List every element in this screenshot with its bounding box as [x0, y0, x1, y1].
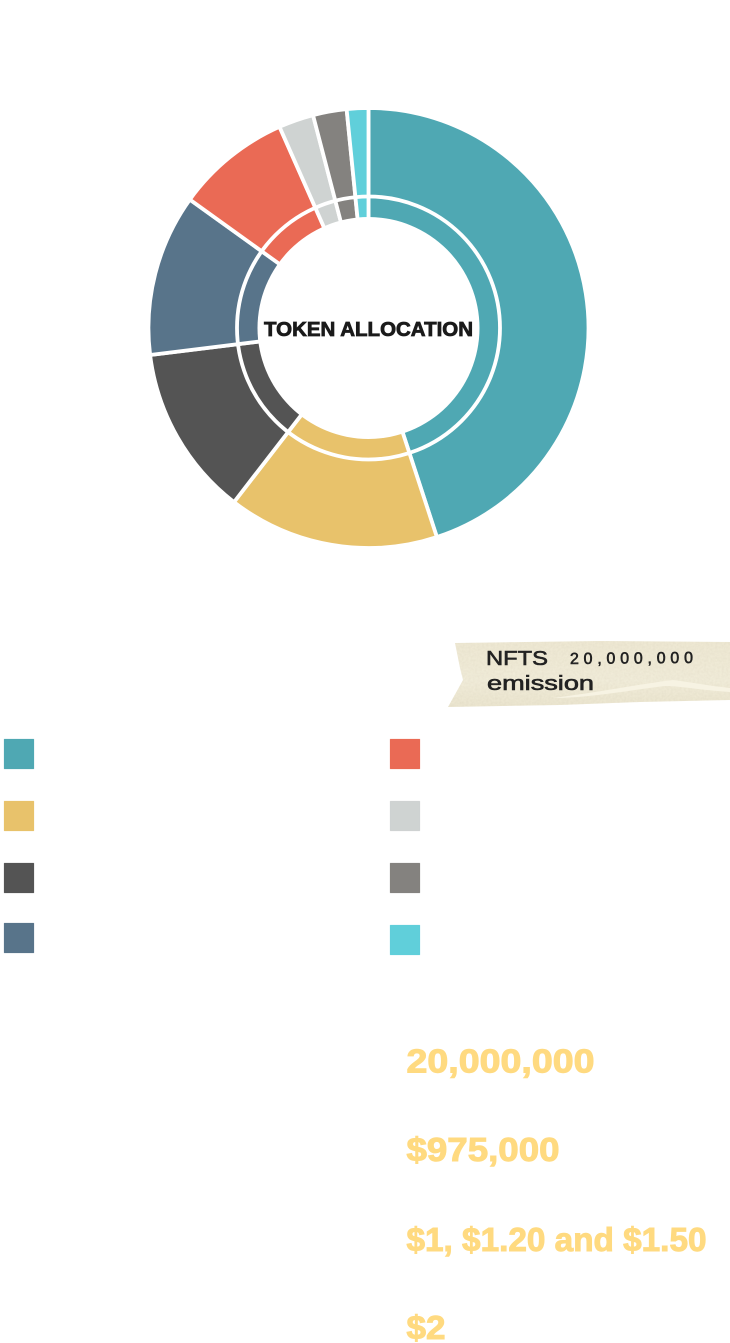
figure: $1, $1.20 and $1.50: $1, $1.20 and $1.50	[406, 1221, 706, 1258]
legend swatch: slate blue	[4, 923, 34, 953]
slice: cyan	[347, 108, 368, 328]
legend	[4, 739, 420, 955]
slice: teal 45%	[368, 108, 589, 537]
tape note: NFTs emission	[448, 641, 730, 707]
legend swatch: light grey	[390, 801, 420, 831]
donut chart: token allocation	[148, 108, 589, 548]
legend swatch: dark grey	[4, 863, 34, 893]
slice: slate blue	[148, 200, 368, 355]
legend swatch: yellow	[4, 801, 34, 831]
legend swatch: cyan	[390, 925, 420, 955]
figure: $975,000: $975,000	[406, 1131, 560, 1168]
legend swatch: medium grey	[390, 863, 420, 893]
slice: light grey	[280, 115, 368, 328]
tape note: NFTs emission: emission	[487, 673, 594, 695]
slice: yellow	[234, 328, 437, 548]
slice: coral red	[190, 127, 368, 328]
tape note: NFTs emission: 20,000,000	[570, 650, 693, 668]
legend swatch: teal	[4, 739, 34, 769]
legend swatch: coral red	[390, 739, 420, 769]
figure: 20,000,000: 20,000,000	[406, 1042, 594, 1080]
tape note: NFTs emission: NFTS	[486, 648, 548, 670]
slice: dark grey	[150, 328, 368, 502]
key figures	[406, 1042, 706, 1343]
slice: medium grey	[313, 109, 368, 328]
chart centre title: TOKEN ALLOCATION	[264, 319, 473, 341]
